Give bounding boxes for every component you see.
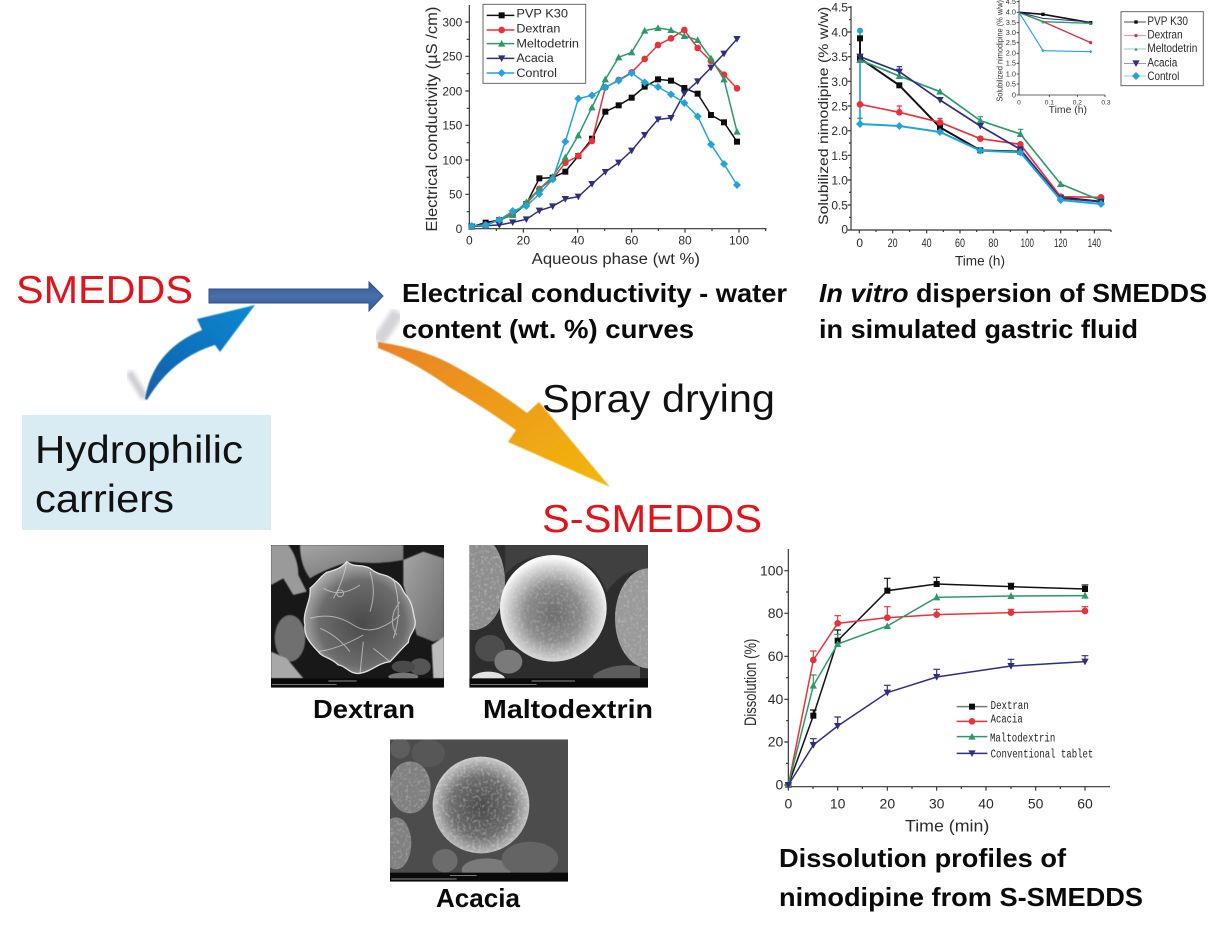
legend: dissolution chart: Acacia [991,713,1023,727]
legend: conductivity chart: Meltodetrin [516,37,579,51]
chart: electrical conductivity vs aqueous phase: 300 [442,15,463,29]
micrograph: maltodextrin [469,545,648,688]
caption: electrical conductivity: Electrical conductivity - water [402,278,787,308]
legend: conductivity chart: Control [516,66,557,80]
legend: dispersion chart [1121,12,1203,86]
heading: SMEDDS: SMEDDS [16,269,193,312]
chart: dissolution profiles [741,549,1110,836]
chart: electrical conductivity vs aqueous phase: Electrical conductivity (µS /cm) [424,7,441,232]
chart: in vitro dispersion time course: 100 [1021,236,1034,250]
chart: in vitro dispersion time course: 80 [988,236,999,250]
chart: in vitro dispersion time course: 4.0 [831,25,848,39]
inset chart: first hours of dispersion: 1.0 [1006,69,1016,78]
inset chart: first hours of dispersion: 0 [1012,90,1016,99]
chart: in vitro dispersion time course: 2.5 [831,99,848,113]
arrow: SMEDDS to S-SMEDDS [378,312,610,487]
chart: dissolution profiles: 80 [768,605,784,621]
panel: hydrophilic carriers [22,415,271,530]
chart: dissolution profiles: 20 [768,734,784,750]
chart: dissolution profiles: 0 [784,796,792,812]
inset chart: first hours of dispersion: 0.3 [1101,99,1111,106]
inset chart: first hours of dispersion: Time (h) [1049,105,1087,116]
caption: in vitro dispersion: In vitro dispersion of SMEDDS [819,278,1207,308]
chart: in vitro dispersion time course: 4.5 [831,1,848,15]
legend: dissolution chart: Maltodextrin [990,731,1055,745]
chart: electrical conductivity vs aqueous phase: 100 [442,153,463,167]
chart: electrical conductivity vs aqueous phase: 50 [449,188,463,202]
legend: dissolution chart: Conventional tablet [991,747,1093,761]
legend: dispersion chart: PVP K30 [1147,15,1188,28]
chart: in vitro dispersion time course: 3.0 [831,75,848,89]
micrograph: dextran [271,545,444,688]
chart: in vitro dispersion time course: 140 [1088,236,1101,250]
chart: dissolution profiles: Dissolution (%) [741,639,760,726]
inset chart: first hours of dispersion: 0 [1017,99,1021,106]
chart: in vitro dispersion time course: 1.5 [831,149,848,163]
chart: dissolution profiles: 10 [830,796,846,812]
chart: in vitro dispersion time course: Solubilized nimodipine (% w/w) [815,7,831,225]
arrow: SMEDDS to characterization [209,282,383,311]
chart: in vitro dispersion time course: 0 [856,236,863,250]
inset chart: first hours of dispersion: 2.5 [1006,38,1016,47]
chart: dissolution profiles: 0 [776,777,784,793]
inset chart: first hours of dispersion [994,0,1111,116]
chart: in vitro dispersion time course: 1.0 [831,174,848,188]
legend: conductivity chart: PVP K30 [516,6,568,20]
chart: dissolution profiles: 30 [929,796,945,812]
chart: dissolution profiles: 50 [1028,796,1044,812]
chart: electrical conductivity vs aqueous phase: 0 [456,222,463,236]
chart: electrical conductivity vs aqueous phase: 250 [442,50,463,64]
chart: dissolution profiles: 40 [768,691,784,707]
caption: dissolution profiles: nimodipine from S-SMEDDS [779,882,1143,912]
chart: electrical conductivity vs aqueous phase: 200 [442,84,463,98]
chart: dissolution profiles: 40 [978,796,994,812]
chart: electrical conductivity vs aqueous phase: 40 [571,233,585,247]
chart: in vitro dispersion time course: 20 [888,236,898,250]
legend: dispersion chart: Dextran [1147,28,1183,41]
chart: in vitro dispersion time course: 3.5 [831,50,848,64]
label: spray drying: Spray drying [542,378,775,421]
legend: conductivity chart [483,4,586,83]
chart: electrical conductivity vs aqueous phase: 0 [466,233,473,247]
chart: dissolution profiles: 60 [768,648,784,664]
label: maltodextrin: Maltodextrin [483,694,653,724]
caption: electrical conductivity: content (wt. %) curves [402,314,694,344]
panel: hydrophilic carriers: carriers [35,478,174,521]
chart: in vitro dispersion time course: 40 [922,236,932,250]
inset chart: first hours of dispersion: 3.5 [1006,18,1016,27]
caption: dissolution profiles: Dissolution profiles of [779,843,1066,873]
panel: hydrophilic carriers: Hydrophilic [35,429,243,472]
legend: dispersion chart: Control [1147,70,1179,83]
caption: in vitro dispersion [819,278,1207,344]
chart: electrical conductivity vs aqueous phase: 100 [729,233,749,247]
chart: electrical conductivity vs aqueous phase: 20 [517,233,530,247]
inset chart: first hours of dispersion: 0.2 [1073,99,1082,106]
inset chart: first hours of dispersion: 3.0 [1006,28,1016,37]
legend: dispersion chart: Meltodetrin [1147,42,1197,55]
inset chart: first hours of dispersion: 2.0 [1006,49,1016,58]
inset chart: first hours of dispersion: 1.5 [1006,59,1016,68]
caption: dissolution profiles [779,843,1143,912]
chart: in vitro dispersion time course: 60 [955,236,965,250]
chart: in vitro dispersion time course: 0.5 [831,198,848,212]
legend: conductivity chart: Dextran [516,21,560,35]
inset chart: first hours of dispersion: 0.1 [1045,99,1054,106]
caption: electrical conductivity [402,278,787,344]
chart: electrical conductivity vs aqueous phase: 150 [442,119,463,133]
chart: dissolution profiles: 60 [1077,796,1093,812]
chart: electrical conductivity vs aqueous phase: 80 [678,233,692,247]
inset chart: first hours of dispersion: 4.0 [1006,8,1016,17]
chart: electrical conductivity vs aqueous phase: Aqueous phase (wt %) [532,251,700,268]
chart: in vitro dispersion time course: 0 [841,223,848,237]
micrograph: acacia [381,738,568,882]
legend: dissolution chart: Dextran [991,699,1029,713]
chart: in vitro dispersion time course: Time (h) [955,252,1005,268]
arrow: hydrophilic carriers to SMEDDS [129,305,255,400]
chart: electrical conductivity vs aqueous phase: 60 [625,233,639,247]
heading: S-SMEDDS: S-SMEDDS [542,498,762,541]
chart: dissolution profiles: 100 [760,562,784,578]
label: dextran: Dextran [313,694,415,724]
legend: conductivity chart: Acacia [516,51,554,65]
caption: in vitro dispersion: in simulated gastric fluid [819,314,1138,344]
legend: dispersion chart: Acacia [1147,56,1178,69]
chart: dissolution profiles: 20 [880,796,895,812]
micrographs group [271,545,648,882]
chart: in vitro dispersion time course [815,0,1203,268]
legend: dissolution chart [957,699,1093,761]
chart: in vitro dispersion time course: 2.0 [831,124,848,138]
chart: electrical conductivity vs aqueous phase [424,4,767,268]
chart: in vitro dispersion time course: 120 [1054,236,1068,250]
label: acacia: Acacia [436,883,521,913]
inset chart: first hours of dispersion: 0.5 [1006,79,1016,88]
chart: dissolution profiles: Time (min) [905,817,989,836]
